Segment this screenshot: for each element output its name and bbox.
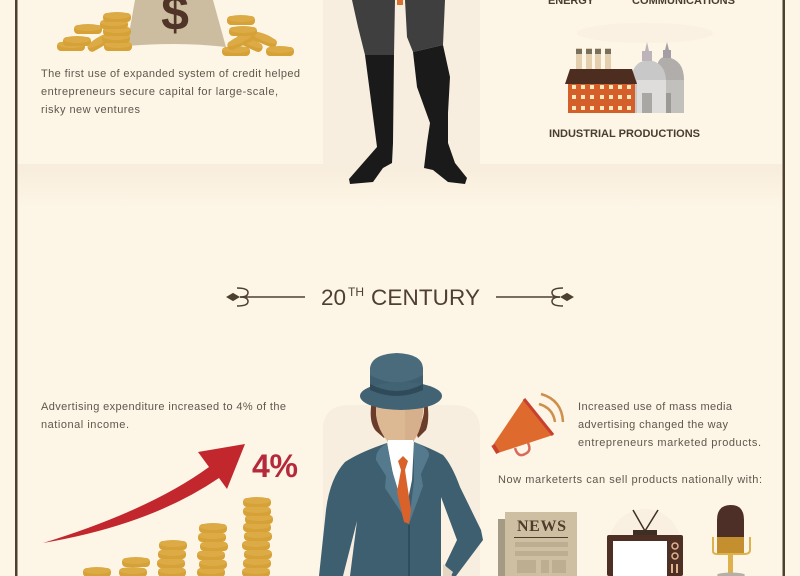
icon: money bag	[127, 0, 226, 47]
text: mass media: advertising changed the way	[578, 419, 728, 431]
text: mass media: Increased use of mass media	[578, 401, 733, 413]
panel: figure backdrop bottom	[323, 405, 480, 576]
ornament: left	[227, 288, 305, 306]
ground band	[18, 164, 782, 208]
text: credit: entrepreneurs secure capital for large-scale,	[41, 86, 278, 98]
chart: coin stacks	[83, 497, 273, 576]
icon: microphone	[713, 505, 750, 576]
panel: figure backdrop top	[323, 0, 480, 165]
text: mass media: entrepreneurs marketed products.	[578, 437, 761, 449]
text: advertising: national income.	[41, 419, 129, 431]
icon: television	[607, 509, 683, 576]
text: 4 percent: 4%	[252, 448, 298, 484]
heading: 20th century: TH	[348, 285, 364, 299]
icon: red growth arrow	[43, 444, 245, 543]
icon: coins left	[57, 12, 132, 53]
label: industrial productions: INDUSTRIAL PRODUCTIONS	[549, 128, 700, 140]
text: marketers: Now marketerts can sell products nationally with:	[498, 474, 762, 486]
icon: factory	[565, 23, 713, 113]
text: credit: The first use of expanded system of credit helped	[41, 68, 300, 80]
figure: legs and boots	[349, 0, 467, 184]
figure: man in suit	[319, 353, 483, 576]
heading: 20th century: 20	[321, 285, 346, 310]
heading: 20th century: CENTURY	[371, 285, 480, 310]
ornament: right	[496, 288, 573, 306]
icon: newspaper	[498, 512, 577, 576]
icon: coins right	[222, 15, 294, 56]
icon: newspaper: NEWS	[517, 518, 566, 535]
text: credit: risky new ventures	[41, 104, 140, 116]
icon: megaphone	[493, 394, 563, 455]
text: advertising: Advertising expenditure increased to 4% of the	[41, 401, 286, 413]
